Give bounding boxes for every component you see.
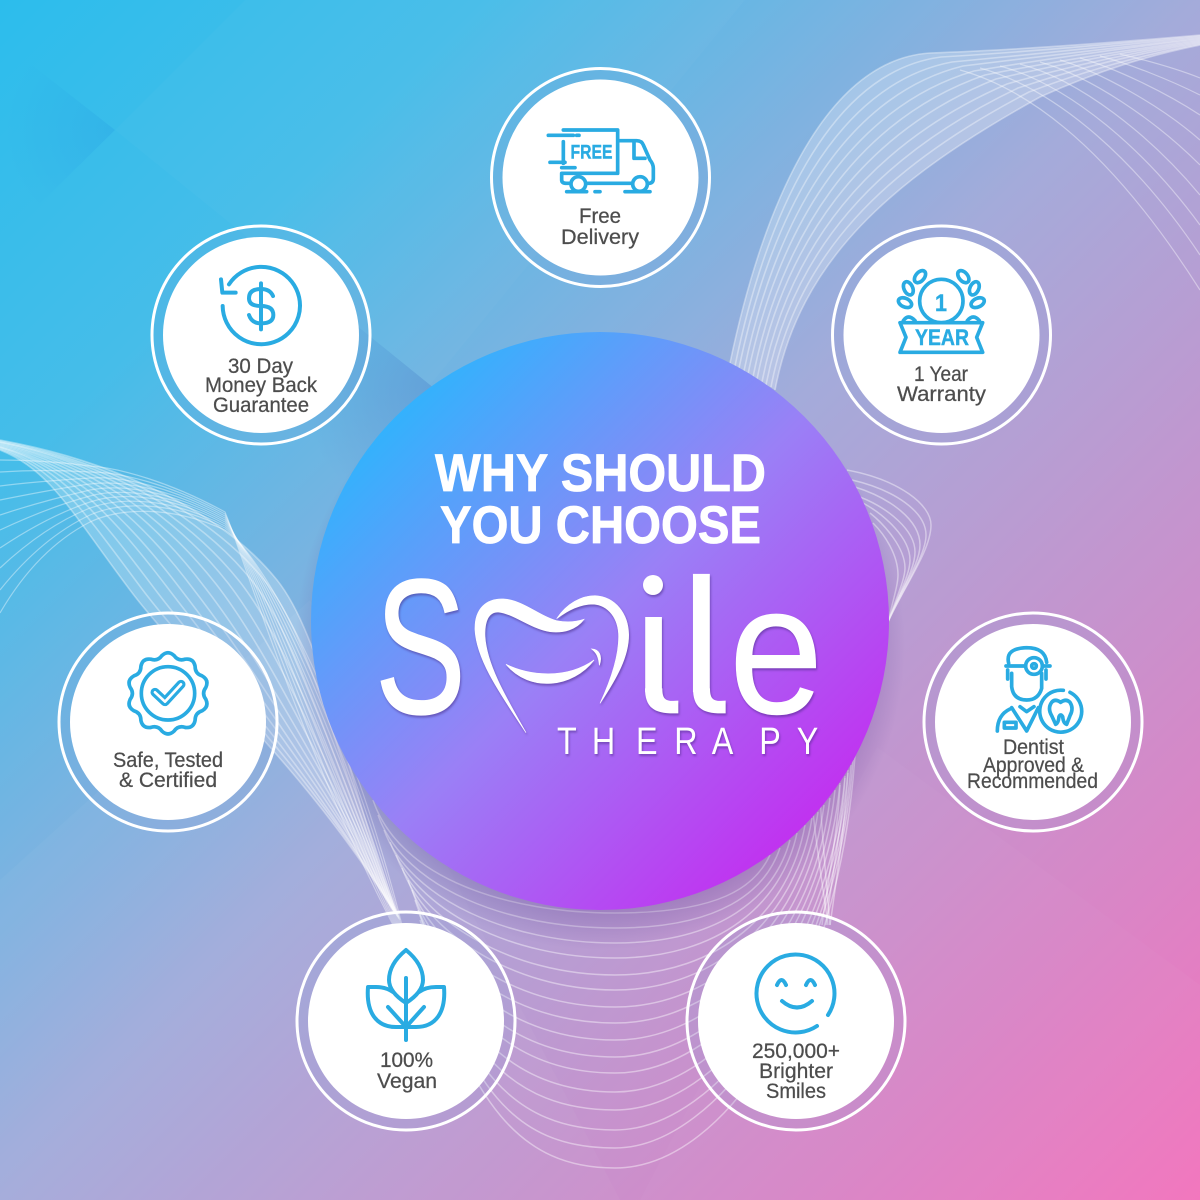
label: vegan: 100% [380,1049,433,1072]
heading [435,444,766,555]
panel: dentist approved [924,613,1142,831]
label: money back guarantee: Money Back [205,374,317,397]
logo: Smile Therapy: l [680,539,723,754]
label: brighter smiles: Smiles [766,1080,826,1103]
logo: Smile Therapy: THERAPY [557,721,818,763]
panel: free delivery [492,68,710,286]
panel: central circle [311,332,889,910]
panel: brighter smiles [687,912,905,1130]
label: free delivery: Free [579,205,621,228]
label: brighter smiles: Brighter [759,1060,833,1083]
panel: safe tested certified [59,613,277,831]
label: dentist approved: Dentist [1003,736,1064,759]
panel: money back guarantee [152,226,370,444]
left flowing wave lines [0,440,402,925]
heading: YOU CHOOSE [440,496,761,555]
panel: one year warranty [832,226,1050,444]
icon: year award [897,269,986,352]
right flowing wave lines [730,35,1200,390]
logo: Smile Therapy: S [375,540,466,755]
icon: money back dollar [221,267,300,344]
logo: Smile Therapy [380,574,819,757]
panel: vegan [297,912,515,1130]
label: vegan: Vegan [377,1070,437,1093]
label: money back guarantee: 30 Day [228,355,293,378]
label: vegan [377,1049,437,1093]
label: dentist approved [967,736,1098,793]
label: brighter smiles [752,1040,840,1103]
label: money back guarantee [205,355,317,417]
label: safe tested certified: Safe, Tested [113,749,223,772]
icon: dentist with tooth [997,648,1082,732]
label: free delivery [561,205,640,249]
icon: delivery truck: FREE [570,142,612,164]
icon: smiley face [756,954,834,1032]
label: safe tested certified [113,749,223,792]
icon: year award: 1 [935,290,947,317]
label: brighter smiles: 250,000+ [752,1040,840,1063]
icon: delivery truck [548,130,653,192]
main circle shadow [295,340,905,950]
logo: Smile Therapy: e [729,548,823,753]
label: dentist approved: Recommended [967,770,1098,793]
logo: Smile Therapy: i [632,542,675,754]
label: free delivery: Delivery [561,226,640,249]
heading: WHY SHOULD [435,444,766,503]
icon: plant [368,950,444,1040]
concentric arc lines beneath central circle [373,755,855,1168]
label: money back guarantee: Guarantee [213,394,309,417]
label: one year warranty [897,363,987,406]
label: one year warranty: 1 Year [914,363,968,386]
label: dentist approved: Approved & [983,754,1084,777]
looped lines right of central circle [812,470,931,925]
icon: year award: YEAR [915,325,969,350]
label: safe tested certified: & Certified [119,769,217,792]
icon: certified badge [129,653,207,734]
label: one year warranty: Warranty [897,383,987,406]
